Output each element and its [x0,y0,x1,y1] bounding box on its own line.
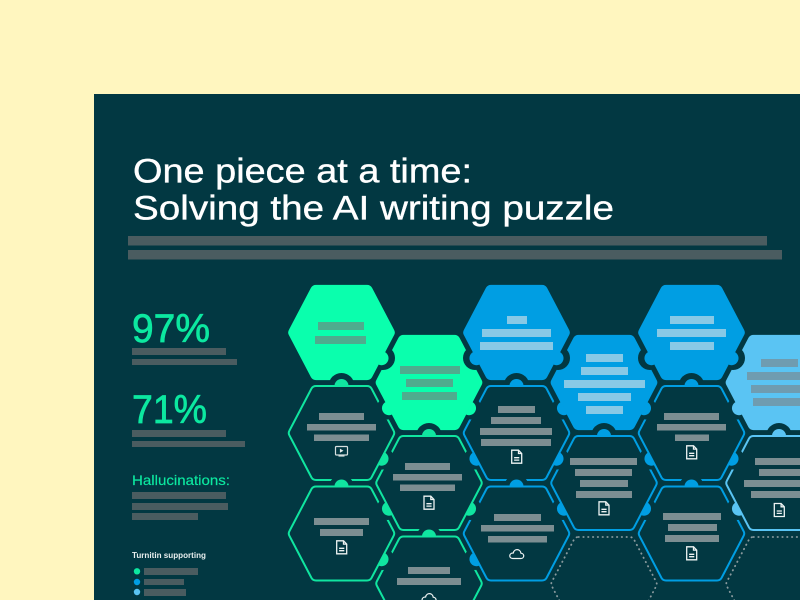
hex: blue document item column 3 [464,379,569,480]
hex: light blue document item [726,429,800,530]
icon: document [774,504,784,516]
icon: document [687,446,697,459]
stat: 97%: 97% [132,307,210,351]
icon: document [424,496,434,509]
stat: 97% [132,307,237,365]
icon: cloud [422,594,436,600]
icon: document [512,450,522,463]
title: Solving the AI writing puzzle [133,190,614,228]
hex: empty dotted slot column 4 [551,537,657,600]
icon: cloud [510,550,524,558]
hex: green document item column 2 [376,429,482,530]
hallucinations note: Hallucinations: [132,472,230,488]
hallucinations note [132,472,230,520]
icon: document [599,502,609,515]
hex: blue document item column 5 lower [639,480,744,580]
legend: Turnitin supporting [132,551,206,560]
title: One piece at a time: [133,152,472,190]
icon: document [337,541,347,554]
hex: blue document item column 4 [551,429,657,530]
hex: column 6 header [726,336,800,430]
stat: 71% [132,388,245,447]
hexagon puzzle [289,286,800,600]
hex: empty dotted slot column 6 [726,537,800,600]
hex: column 1 header [289,286,394,380]
hex: column 5 header [639,286,744,380]
hex: column 2 header [376,336,482,430]
hex: column 4 header [551,336,657,430]
dark panel [94,94,800,600]
legend [132,551,206,596]
hex: green video item [289,379,394,480]
stat: 71%: 71% [132,388,207,432]
hex: blue document item column 5 [639,379,744,480]
subtitle placeholder bars [128,236,782,260]
hex: blue cloud item [464,480,569,580]
icon: video monitor [336,446,348,456]
title [133,152,614,228]
hex: column 3 header [464,286,569,380]
hex: green cloud item [376,530,482,600]
icon: document [687,547,697,560]
hex: green document item [289,480,394,580]
